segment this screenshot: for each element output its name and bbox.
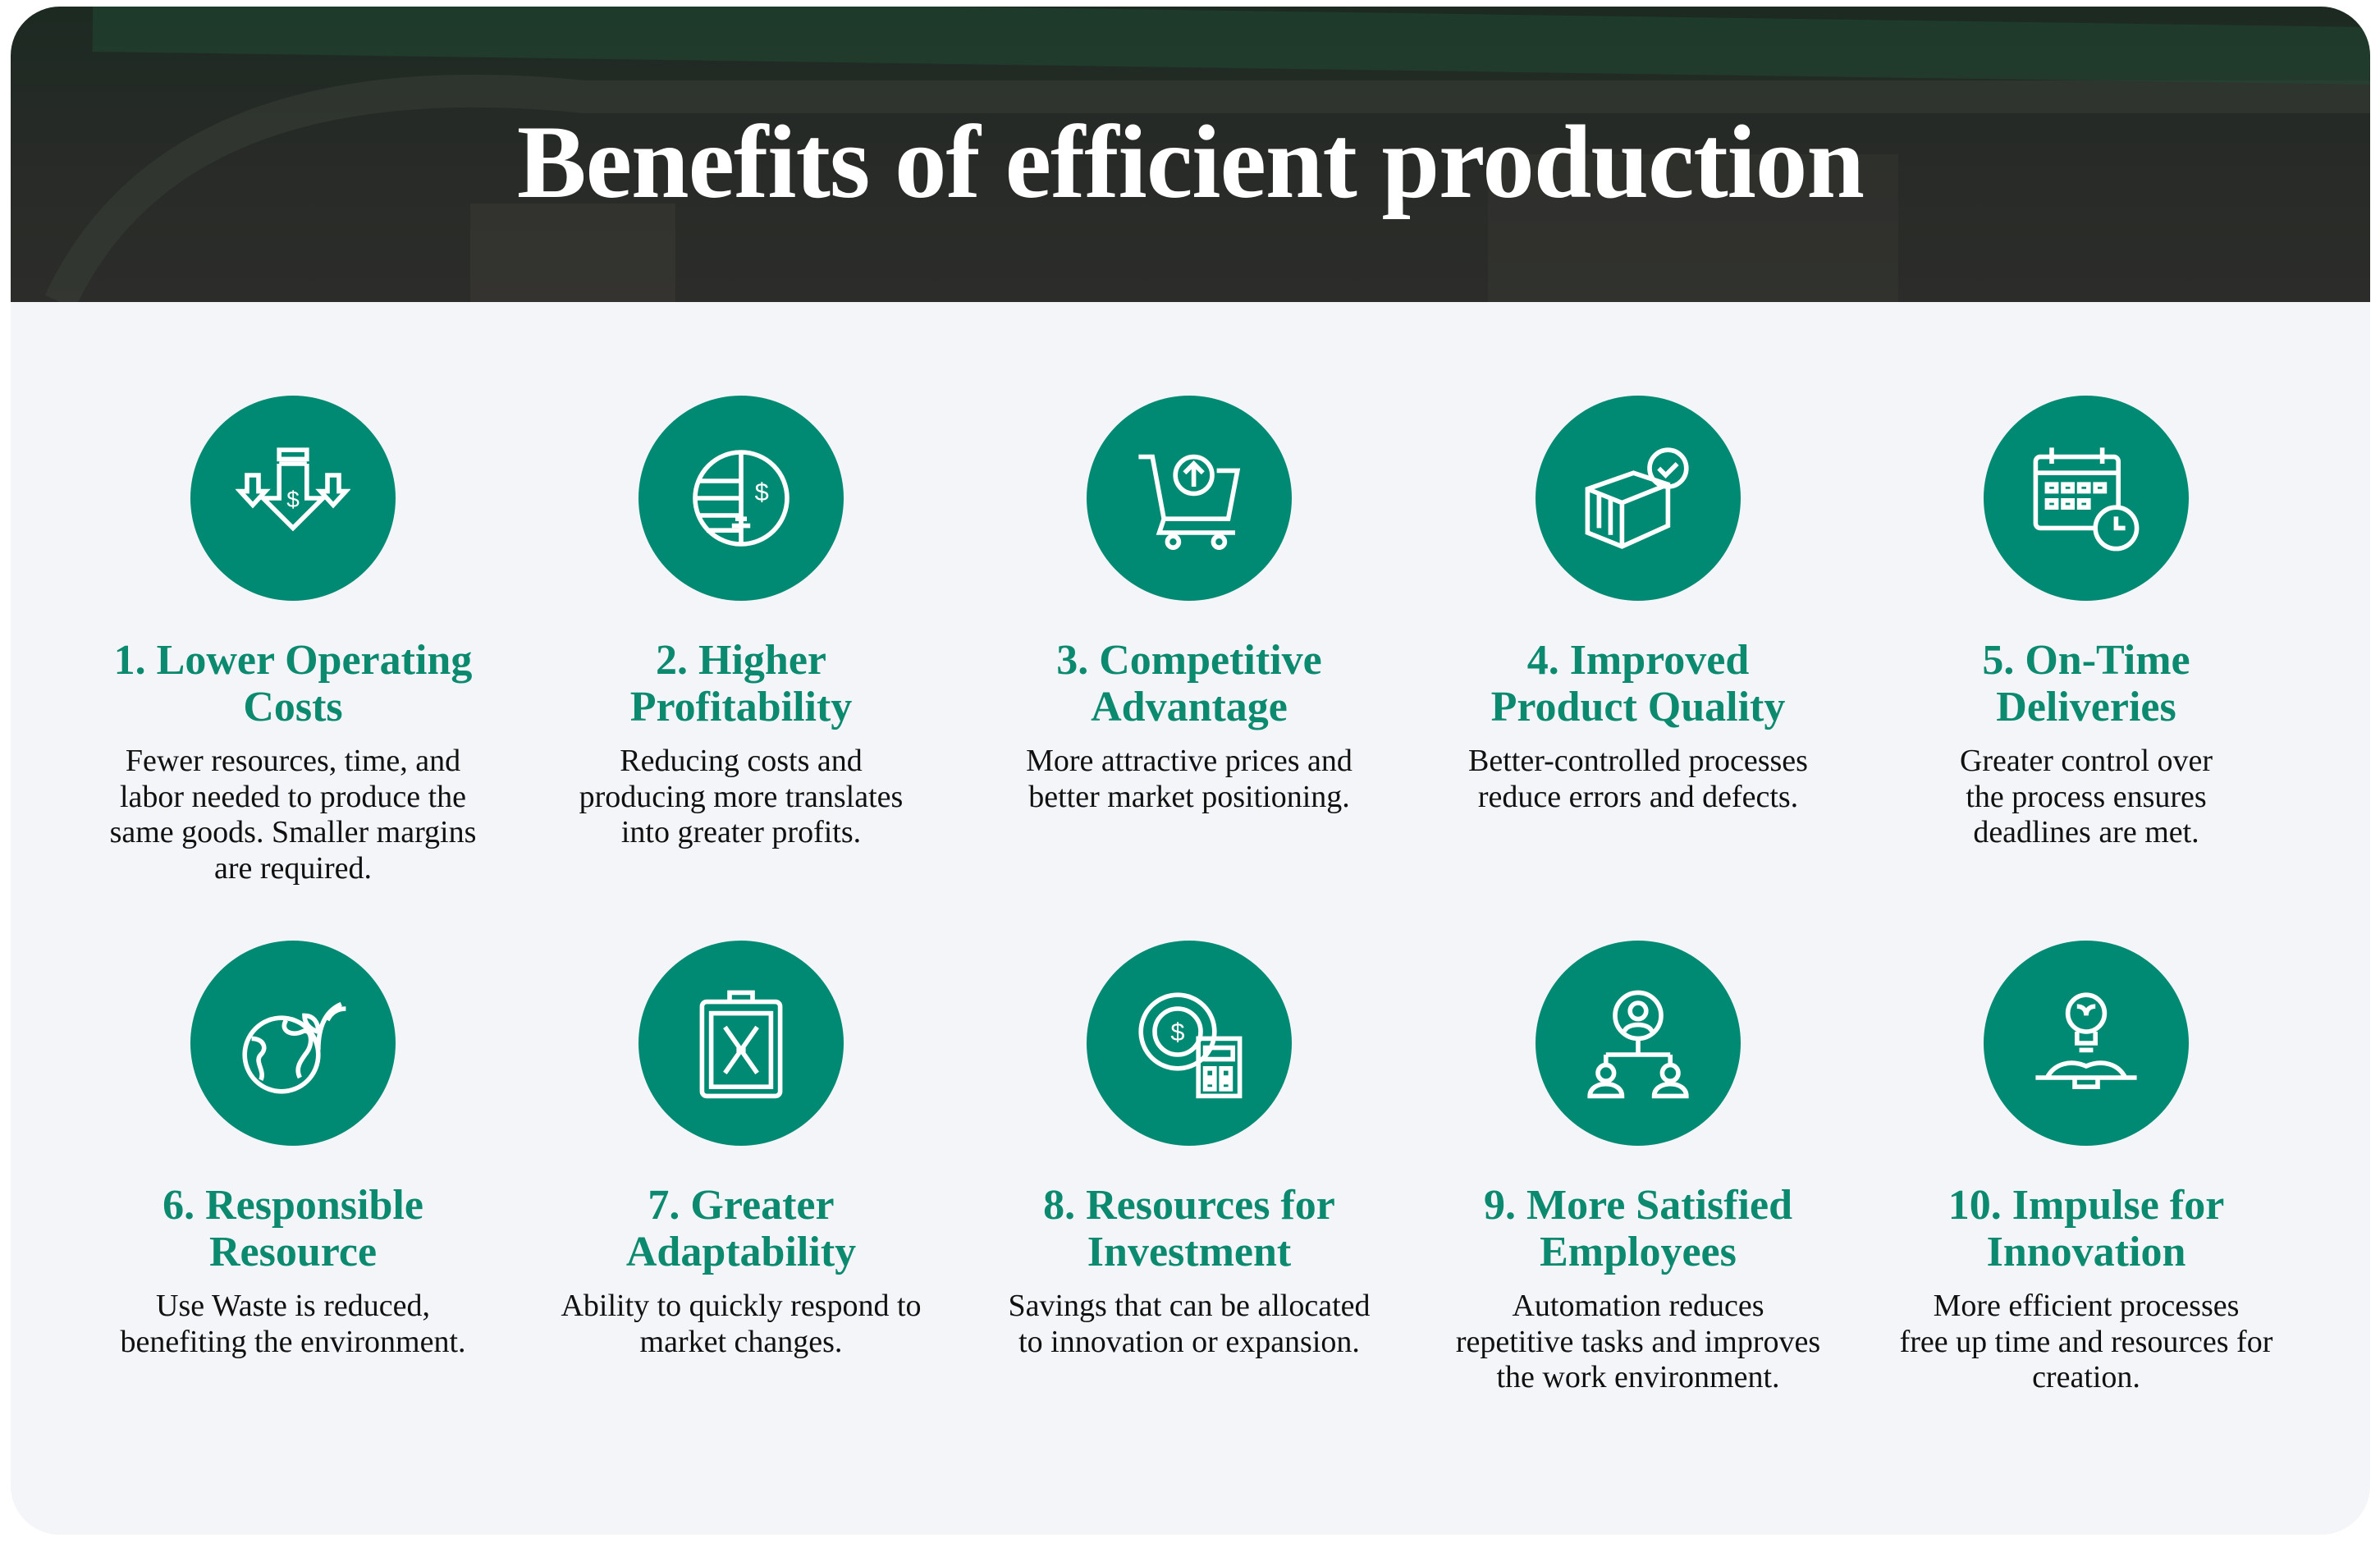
description 8: to innovation or expansion. — [1018, 1325, 1360, 1359]
description 9: Automation reduces — [1512, 1289, 1764, 1323]
icon: box with badge — [1536, 396, 1741, 601]
description 4 — [1468, 744, 1808, 814]
title: Benefits of efficient production — [517, 105, 1864, 220]
heading 7 — [626, 1182, 856, 1275]
description 7: market changes. — [640, 1325, 842, 1359]
description 6: benefiting the environment. — [120, 1325, 466, 1359]
description 1: are required. — [214, 850, 372, 885]
heading 9: 9. More Satisfied — [1484, 1182, 1792, 1229]
description 2 — [579, 744, 903, 849]
heading 2: 2. Higher — [656, 637, 826, 684]
icon: globe with sprout — [190, 941, 396, 1146]
icon: lightbulb on book — [1984, 941, 2189, 1146]
heading 3: Advantage — [1091, 684, 1288, 730]
description 9: repetitive tasks and improves — [1456, 1325, 1820, 1359]
description 7 — [561, 1289, 922, 1359]
heading 4: Product Quality — [1491, 684, 1785, 730]
heading 4 — [1491, 637, 1785, 730]
item 7 — [561, 941, 922, 1359]
heading 1: 1. Lower Operating — [114, 637, 472, 684]
icon: people network — [1536, 941, 1741, 1146]
description 10: creation. — [2032, 1360, 2140, 1394]
description 5 — [1960, 744, 2213, 849]
icon: clipboard strategy — [638, 941, 844, 1146]
description 6: Use Waste is reduced, — [156, 1289, 430, 1323]
description 5: deadlines are met. — [1973, 815, 2199, 849]
item 6 — [120, 941, 466, 1359]
description 10: More efficient processes — [1934, 1289, 2239, 1323]
description 7: Ability to quickly respond to — [561, 1289, 922, 1323]
description 9 — [1456, 1289, 1820, 1394]
heading 7: Adaptability — [626, 1229, 856, 1275]
description 1: same goods. Smaller margins — [110, 815, 476, 849]
heading 3: 3. Competitive — [1056, 637, 1322, 684]
item 8 — [1008, 941, 1371, 1359]
item 4 — [1468, 396, 1808, 814]
description 5: Greater control over — [1960, 744, 2213, 778]
heading 1 — [114, 637, 472, 730]
icon: dollar chart calculator — [1087, 941, 1292, 1146]
description 10: free up time and resources for — [1900, 1325, 2272, 1359]
description 3 — [1026, 744, 1352, 814]
description 9: the work environment. — [1496, 1360, 1780, 1394]
description 4: reduce errors and defects. — [1478, 780, 1798, 814]
description 3: better market positioning. — [1028, 780, 1350, 814]
description 1: Fewer resources, time, and — [126, 744, 460, 778]
heading 2: Profitability — [630, 684, 852, 730]
heading 9 — [1484, 1182, 1792, 1275]
icon: dollar chart calculator: $ — [1170, 1018, 1185, 1046]
heading 5: Deliveries — [1996, 684, 2176, 730]
description 3: More attractive prices and — [1026, 744, 1352, 778]
heading 7: 7. Greater — [648, 1182, 835, 1229]
description 8: Savings that can be allocated — [1008, 1289, 1371, 1323]
heading 2 — [630, 637, 852, 730]
icon: calendar clock — [1984, 396, 2189, 601]
item 2 — [579, 396, 903, 849]
description 1 — [110, 744, 476, 885]
icon: pie chart dollar — [638, 396, 844, 601]
description 2: Reducing costs and — [620, 744, 863, 778]
description 6 — [120, 1289, 466, 1359]
heading 6 — [162, 1182, 423, 1275]
heading 5: 5. On-Time — [1982, 637, 2190, 684]
heading 9: Employees — [1540, 1229, 1737, 1275]
item 1 — [110, 396, 476, 885]
heading 8: 8. Resources for — [1043, 1182, 1335, 1229]
item 3 — [1026, 396, 1352, 814]
description 5: the process ensures — [1966, 780, 2207, 814]
description 8 — [1008, 1289, 1371, 1359]
icon: pie chart dollar: $ — [755, 478, 769, 506]
icon: cost arrows down: $ — [286, 487, 300, 512]
heading 4: 4. Improved — [1527, 637, 1749, 684]
icon: shopping cart — [1087, 396, 1292, 601]
description 1: labor needed to produce the — [120, 780, 466, 814]
icon: cost arrows down — [190, 396, 396, 601]
description 10 — [1900, 1289, 2273, 1394]
heading 10: 10. Impulse for — [1948, 1182, 2224, 1229]
description 2: producing more translates — [579, 780, 903, 814]
item 5 — [1960, 396, 2213, 849]
heading 8 — [1043, 1182, 1335, 1275]
heading 8: Investment — [1087, 1229, 1291, 1275]
heading 10 — [1948, 1182, 2224, 1275]
heading 10: Innovation — [1987, 1229, 2185, 1275]
description 4: Better-controlled processes — [1468, 744, 1808, 778]
description 2: into greater profits. — [621, 815, 861, 849]
heading 1: Costs — [243, 684, 343, 730]
item 9 — [1456, 941, 1820, 1394]
heading 3 — [1056, 637, 1322, 730]
heading 6: Resource — [209, 1229, 377, 1275]
heading 6: 6. Responsible — [162, 1182, 423, 1229]
heading 5 — [1982, 637, 2190, 730]
header banner — [11, 7, 2370, 302]
item 10 — [1900, 941, 2273, 1394]
